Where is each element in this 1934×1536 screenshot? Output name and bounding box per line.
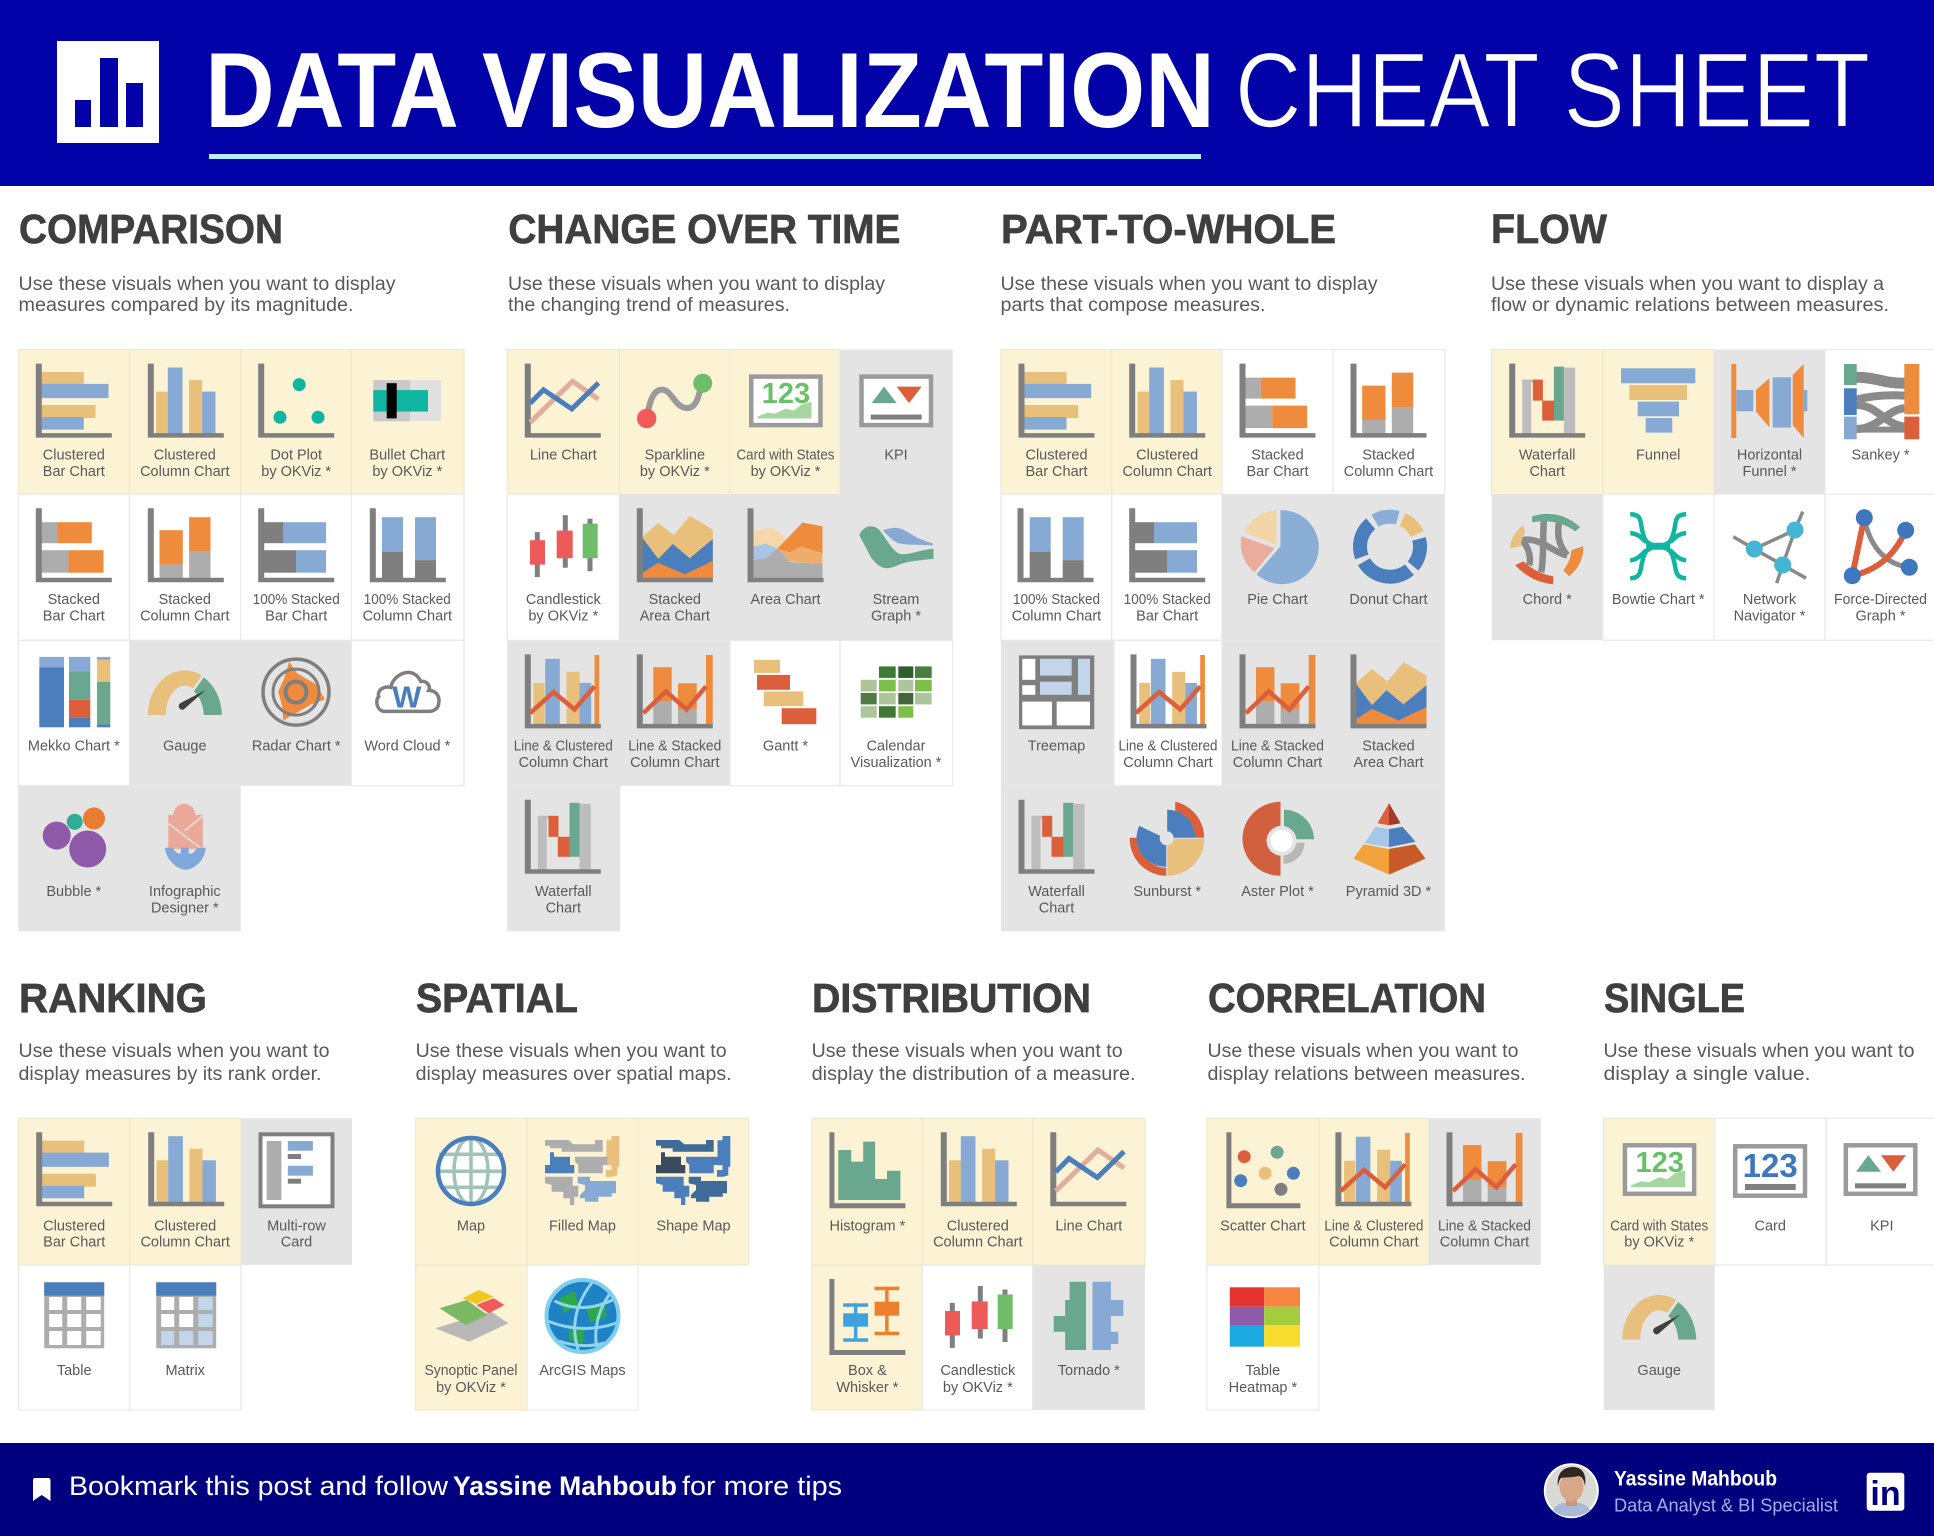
tile: Line and Clustered Column Chart: Line & Clustered (1324, 1218, 1423, 1234)
tile: Mekko Chart (18, 640, 130, 786)
tile: Tornado (1033, 1265, 1145, 1410)
description: flow: Use these visuals when you want to display a (1491, 274, 1884, 295)
tile: Matrix (130, 1265, 241, 1410)
description: part-to-whole (1000, 274, 1378, 316)
tile: Bullet Chart by OKViz: Bullet Chart (369, 448, 445, 464)
tile: Stacked Bar Chart: Stacked (1251, 448, 1304, 464)
tile: Line and Stacked Column Chart: Line & Stacked (628, 738, 721, 754)
author avatar (1544, 1463, 1599, 1518)
icon: logo bar chart (57, 41, 159, 143)
tile: Candlestick by OKViz (507, 494, 619, 640)
tile: Clustered Bar Chart: Clustered (43, 1218, 105, 1234)
tile: Stacked Column Chart (129, 494, 241, 640)
tile: Stacked Bar Chart: Stacked (48, 592, 100, 608)
tile: Box and Whisker (812, 1265, 922, 1410)
tile: Line and Stacked Column Chart: Column Chart (1233, 755, 1322, 771)
tile: Sparkline by OKViz (619, 350, 730, 495)
tile: Clustered Column Chart: Column Chart (1122, 464, 1212, 480)
heading: part-to-whole: PART-TO-WHOLE (1001, 206, 1336, 252)
tile: 100% Stacked Column Chart (1001, 494, 1112, 640)
tile: Bowtie Chart: Bowtie Chart * (1612, 592, 1705, 608)
tile: Force-Directed Graph: Force-Directed (1834, 592, 1927, 608)
tile: 100% Stacked Column Chart: 100% Stacked (1013, 592, 1100, 608)
tile: Sunburst: Sunburst * (1133, 884, 1201, 900)
tile: Card with States by OKViz: 123 (1636, 1147, 1684, 1179)
heading: ranking: RANKING (19, 975, 207, 1021)
tile: Clustered Column Chart: Clustered (154, 1218, 216, 1234)
tile: Table Heatmap: Heatmap * (1229, 1380, 1298, 1396)
panel: change over time (507, 206, 953, 931)
tile: Sparkline by OKViz: Sparkline (645, 448, 705, 464)
tile: Sparkline by OKViz: by OKViz * (640, 464, 710, 480)
tile: Waterfall Chart: Waterfall (1519, 448, 1576, 464)
tile: Network Navigator: Network (1743, 592, 1797, 608)
tile: Shape Map: Shape Map (656, 1218, 731, 1234)
tile: Clustered Column Chart: Clustered (154, 448, 216, 464)
tile: Card with States by OKViz: Card with States (1610, 1218, 1708, 1234)
tile: Waterfall Chart (1492, 350, 1603, 495)
tile: Waterfall Chart (1001, 786, 1112, 931)
tile: 100% Stacked Bar Chart (241, 494, 352, 640)
tile: Candlestick by OKViz: by OKViz * (528, 609, 599, 625)
panel: correlation (1207, 975, 1541, 1410)
tile: Force-Directed Graph (1825, 494, 1934, 640)
tile: Line and Clustered Column Chart: Line & Clustered (1118, 738, 1218, 754)
tile: Clustered Column Chart: Column Chart (140, 1234, 230, 1250)
tile: Stacked Bar Chart: Bar Chart (43, 609, 105, 625)
author name and role (1614, 1468, 1838, 1516)
tile: Aster Plot (1222, 786, 1333, 931)
heading: flow: FLOW (1491, 206, 1607, 252)
description: single: display a single value. (1604, 1064, 1810, 1085)
tile: Area Chart (730, 494, 840, 640)
description: part-to-whole: Use these visuals when you want to display (1000, 274, 1378, 295)
tile: Stacked Column Chart (1333, 350, 1445, 495)
tile: 100% Stacked Bar Chart: 100% Stacked (1124, 592, 1211, 608)
tile: Bullet Chart by OKViz: by OKViz * (372, 464, 443, 480)
tile: Synoptic Panel by OKViz (416, 1265, 527, 1410)
tile: ArcGIS Maps: ArcGIS Maps (539, 1363, 626, 1379)
tile: Sankey: Sankey * (1851, 448, 1910, 464)
tile: Line and Clustered Column Chart: Line & Clustered (514, 738, 613, 754)
tile: Infographic Designer: Infographic (149, 884, 221, 900)
tile: Line and Clustered Column Chart (507, 640, 620, 786)
tile: Line and Clustered Column Chart: Column Chart (1329, 1234, 1419, 1250)
tile: Synoptic Panel by OKViz: Synoptic Panel (424, 1363, 518, 1379)
tile: Waterfall Chart: Waterfall (1028, 884, 1085, 900)
tile: KPI: KPI (884, 448, 908, 464)
tile: Card: Card (1754, 1218, 1786, 1234)
tile: Waterfall Chart: Waterfall (535, 884, 592, 900)
tile: 100% Stacked Column Chart: Column Chart (363, 609, 452, 625)
tile: Clustered Column Chart (922, 1118, 1033, 1265)
tile: Calendar Visualization: Calendar (867, 738, 926, 754)
tile: Stacked Column Chart: Stacked (1362, 448, 1415, 464)
tile: Bullet Chart by OKViz (351, 350, 464, 495)
description: comparison: Use these visuals when you want to display (18, 274, 396, 295)
tile: Radar Chart: Radar Chart * (252, 738, 341, 754)
tile: Map: Map (457, 1218, 485, 1234)
title underline (209, 154, 1201, 159)
tile: Line and Stacked Column Chart (619, 640, 730, 786)
tile: Scatter Chart (1207, 1118, 1319, 1265)
panel: single (1604, 975, 1934, 1410)
tile: Gauge (1604, 1265, 1715, 1410)
description: part-to-whole: parts that compose measures. (1000, 295, 1266, 316)
tile: Table (19, 1265, 130, 1410)
tile: Waterfall Chart: Chart (1529, 464, 1565, 480)
tile: Histogram (812, 1118, 922, 1265)
tile: Gantt (730, 640, 840, 786)
tile: Multi-row Card: Multi-row (267, 1218, 326, 1234)
tile: Area Chart: Area Chart (750, 592, 821, 608)
tile: Clustered Bar Chart (1001, 350, 1112, 495)
tile: Stream Graph (840, 494, 953, 640)
tile: Sankey (1825, 350, 1934, 495)
tile: Stacked Area Chart (1333, 640, 1445, 786)
description: ranking: Use these visuals when you want to (18, 1041, 330, 1062)
tile: Tornado: Tornado * (1058, 1363, 1120, 1379)
heading: spatial: SPATIAL (416, 975, 578, 1021)
footer call to action: Yassine Mahboub (453, 1471, 677, 1501)
author name and role: Data Analyst & BI Specialist (1614, 1496, 1838, 1516)
tile: Donut Chart (1333, 494, 1445, 640)
tile: Waterfall Chart: Chart (1039, 900, 1074, 916)
tile: Infographic Designer (129, 786, 241, 931)
tile: Mekko Chart: Mekko Chart * (28, 738, 120, 754)
tile: Multi-row Card (241, 1118, 352, 1265)
tile: Line and Stacked Column Chart (1222, 640, 1333, 786)
tile: 100% Stacked Bar Chart: Bar Chart (265, 609, 327, 625)
tile: Card with States by OKViz: by OKViz * (1624, 1234, 1694, 1250)
tile: Stacked Area Chart: Stacked (649, 592, 701, 608)
tile: Card (1715, 1118, 1826, 1265)
tile: Clustered Column Chart: Clustered (947, 1218, 1009, 1234)
tile: Horizontal Funnel: Horizontal (1737, 448, 1802, 464)
tile: Clustered Bar Chart: Bar Chart (1025, 464, 1088, 480)
tile: Matrix: Matrix (165, 1363, 206, 1379)
tile: Infographic Designer: Designer * (151, 900, 219, 916)
tile: Donut Chart: Donut Chart (1349, 592, 1428, 608)
tile: Clustered Column Chart: Clustered (1136, 448, 1198, 464)
tile: Gantt: Gantt * (763, 738, 808, 754)
header band (0, 0, 1934, 186)
description: spatial: Use these visuals when you want to (416, 1041, 727, 1062)
tile: KPI (1826, 1118, 1934, 1265)
tile: Line Chart: Line Chart (530, 448, 597, 464)
tile: Clustered Bar Chart: Bar Chart (43, 464, 105, 480)
tile: Calendar Visualization: Visualization * (851, 755, 942, 771)
tile: Scatter Chart: Scatter Chart (1220, 1218, 1306, 1234)
tile: Network Navigator: Navigator * (1734, 609, 1806, 625)
tile: Stacked Area Chart: Area Chart (640, 609, 710, 625)
tile: Bowtie Chart (1603, 494, 1714, 640)
description: correlation: Use these visuals when you want to (1208, 1041, 1518, 1062)
tile: 100% Stacked Bar Chart: 100% Stacked (253, 592, 340, 608)
tile: Dot Plot by OKViz (241, 350, 352, 495)
tile: Line and Stacked Column Chart (1429, 1118, 1541, 1265)
tile: Clustered Bar Chart: Clustered (43, 448, 105, 464)
tile: Funnel: Funnel (1636, 448, 1680, 464)
tile: Synoptic Panel by OKViz: by OKViz * (436, 1380, 506, 1396)
heading: change over time: CHANGE OVER TIME (508, 206, 900, 252)
tile: Stacked Area Chart: Area Chart (1353, 755, 1424, 771)
tile: Table Heatmap (1207, 1265, 1319, 1410)
tile: 100% Stacked Column Chart: 100% Stacked (364, 592, 451, 608)
tile: Aster Plot: Aster Plot * (1241, 884, 1314, 900)
tile: Horizontal Funnel (1714, 350, 1825, 495)
tile: Histogram: Histogram * (830, 1218, 906, 1234)
tile: Dot Plot by OKViz: by OKViz * (261, 464, 331, 480)
description: flow (1491, 274, 1889, 316)
tile: Table: Table (57, 1363, 92, 1379)
tile: Card with States by OKViz (730, 350, 840, 495)
description: ranking (18, 1041, 330, 1085)
author name and role: Yassine Mahboub (1614, 1468, 1777, 1491)
tile: Clustered Bar Chart (19, 1118, 130, 1265)
tile: 100% Stacked Column Chart: Column Chart (1012, 609, 1101, 625)
tile: Clustered Column Chart (130, 1118, 241, 1265)
description: distribution: display the distribution of a measure. (812, 1064, 1136, 1085)
icon: bookmark (33, 1478, 50, 1501)
tile: Waterfall Chart: Chart (546, 900, 581, 916)
tile: Line Chart (507, 350, 619, 495)
tile: Line and Clustered Column Chart: Column Chart (519, 755, 608, 771)
tile: Chord: Chord * (1523, 592, 1572, 608)
tile: Stacked Bar Chart (18, 494, 130, 640)
tile: Line and Stacked Column Chart: Column Chart (630, 755, 720, 771)
tile: Stacked Column Chart: Column Chart (140, 609, 230, 625)
tile: Line Chart: Line Chart (1055, 1218, 1122, 1234)
tile: Sunburst (1112, 786, 1222, 931)
footer band (0, 1443, 1934, 1536)
tile: Card: 123 (1743, 1147, 1798, 1184)
tile: Card with States by OKViz: 123 (762, 378, 810, 410)
tile: Word Cloud: Word Cloud * (364, 738, 451, 754)
tile: Stacked Column Chart: Column Chart (1344, 464, 1433, 480)
description: distribution (812, 1041, 1136, 1085)
tile: Gauge (129, 640, 241, 786)
description: flow: flow or dynamic relations between measures. (1491, 295, 1889, 316)
tile: Box and Whisker: Box & (848, 1363, 887, 1379)
description: distribution: Use these visuals when you want to (812, 1041, 1123, 1062)
panel: flow (1491, 206, 1934, 640)
description: spatial: display measures over spatial maps. (416, 1064, 732, 1085)
tile: Network Navigator (1714, 494, 1825, 640)
description: change over time: Use these visuals when you want to display (508, 274, 886, 295)
description: comparison: measures compared by its magnitude. (18, 295, 354, 316)
tile: Card with States by OKViz: by OKViz * (751, 464, 821, 480)
tile: Candlestick by OKViz: Candlestick (526, 592, 602, 608)
description: comparison (18, 274, 396, 316)
tile: Waterfall Chart (507, 786, 620, 931)
tile: 100% Stacked Column Chart (351, 494, 464, 640)
tile: Pie Chart: Pie Chart (1247, 592, 1308, 608)
tile: Line and Clustered Column Chart: Column Chart (1123, 755, 1213, 771)
tile: Table Heatmap: Table (1246, 1363, 1280, 1379)
tile: Chord (1492, 494, 1603, 640)
panel: comparison (18, 206, 464, 931)
tile: Gauge: Gauge (1637, 1363, 1681, 1379)
tile: Card with States by OKViz: Card with States (736, 448, 834, 464)
title (205, 30, 1870, 150)
heading: single: SINGLE (1604, 975, 1745, 1021)
tile: Stream Graph: Stream (873, 592, 919, 608)
heading: comparison: COMPARISON (19, 206, 283, 252)
panel: ranking (18, 975, 352, 1410)
footer call to action: for more tips (682, 1471, 842, 1501)
tile: Clustered Column Chart: Column Chart (933, 1234, 1023, 1250)
tile: Shape Map (638, 1118, 748, 1265)
panel: spatial (416, 975, 748, 1410)
tile: Clustered Column Chart: Column Chart (140, 464, 230, 480)
tile: Line and Stacked Column Chart: Line & Stacked (1231, 738, 1324, 754)
tile: Clustered Bar Chart (18, 350, 130, 495)
description: single (1604, 1041, 1914, 1085)
description: correlation (1208, 1041, 1526, 1085)
description: single: Use these visuals when you want to (1604, 1041, 1914, 1062)
tile: Box and Whisker: Whisker * (836, 1380, 899, 1396)
tile: Line and Clustered Column Chart (1319, 1118, 1429, 1265)
tile: 100% Stacked Bar Chart (1112, 494, 1222, 640)
tile: Clustered Bar Chart: Clustered (1025, 448, 1088, 464)
footer call to action (69, 1471, 842, 1501)
tile: ArcGIS Maps (527, 1265, 638, 1410)
tile: Clustered Column Chart (1112, 350, 1222, 495)
tile: Stream Graph: Graph * (871, 609, 921, 625)
tile: Candlestick by OKViz (922, 1265, 1033, 1410)
tile: Stacked Area Chart: Stacked (1362, 738, 1415, 754)
tile: Force-Directed Graph: Graph * (1856, 609, 1906, 625)
description: change over time (508, 274, 886, 316)
tile: Gauge: Gauge (163, 738, 207, 754)
tile: Treemap (1001, 640, 1114, 786)
icon: linkedin: in (1870, 1475, 1901, 1513)
title: DATA VISUALIZATION (205, 30, 1215, 150)
tile: Calendar Visualization (840, 640, 953, 786)
tile: Line and Stacked Column Chart: Line & Stacked (1438, 1218, 1531, 1234)
tile: Candlestick by OKViz: by OKViz * (943, 1380, 1013, 1396)
tile: Bubble (18, 786, 130, 931)
heading: distribution: DISTRIBUTION (812, 975, 1091, 1021)
description: spatial (416, 1041, 732, 1085)
tile: Radar Chart (241, 640, 352, 786)
tile: Dot Plot by OKViz: Dot Plot (270, 448, 322, 464)
heading: correlation: CORRELATION (1208, 975, 1486, 1021)
tile: Stacked Bar Chart: Bar Chart (1246, 464, 1309, 480)
tile: Line and Stacked Column Chart: Column Chart (1440, 1234, 1529, 1250)
tile: Treemap: Treemap (1028, 738, 1085, 754)
tile: Clustered Bar Chart: Bar Chart (43, 1234, 105, 1250)
tile: Card with States by OKViz (1604, 1118, 1715, 1265)
tile: KPI (840, 350, 953, 495)
tile: Filled Map (527, 1118, 638, 1265)
tile: KPI: KPI (1870, 1218, 1893, 1234)
tile: Stacked Bar Chart (1222, 350, 1333, 495)
tile: Stacked Column Chart: Stacked (159, 592, 211, 608)
tile: Funnel (1603, 350, 1714, 495)
tile: Pyramid 3D: Pyramid 3D * (1346, 884, 1432, 900)
tile: Horizontal Funnel: Funnel * (1742, 464, 1797, 480)
tile: Multi-row Card: Card (281, 1234, 312, 1250)
tile: Candlestick by OKViz: Candlestick (940, 1363, 1016, 1379)
description: ranking: display measures by its rank order. (18, 1064, 322, 1085)
tile: Line and Clustered Column Chart (1114, 640, 1222, 786)
tile: Filled Map: Filled Map (549, 1218, 616, 1234)
tile: Line Chart (1033, 1118, 1145, 1265)
tile: Word Cloud (351, 640, 464, 786)
tile: Map (416, 1118, 527, 1265)
panel: distribution (812, 975, 1145, 1410)
panel: part-to-whole (1000, 206, 1445, 931)
tile: Pyramid 3D (1333, 786, 1445, 931)
tile: 100% Stacked Bar Chart: Bar Chart (1136, 609, 1198, 625)
description: correlation: display relations between measures. (1208, 1064, 1526, 1085)
tile: Clustered Column Chart (129, 350, 241, 495)
tile: Pie Chart (1222, 494, 1333, 640)
description: change over time: the changing trend of measures. (508, 295, 790, 316)
tile: Bubble: Bubble * (46, 884, 102, 900)
footer call to action: Bookmark this post and follow (69, 1471, 449, 1501)
tile: Stacked Area Chart (619, 494, 730, 640)
tile: Word Cloud: W (392, 679, 422, 714)
